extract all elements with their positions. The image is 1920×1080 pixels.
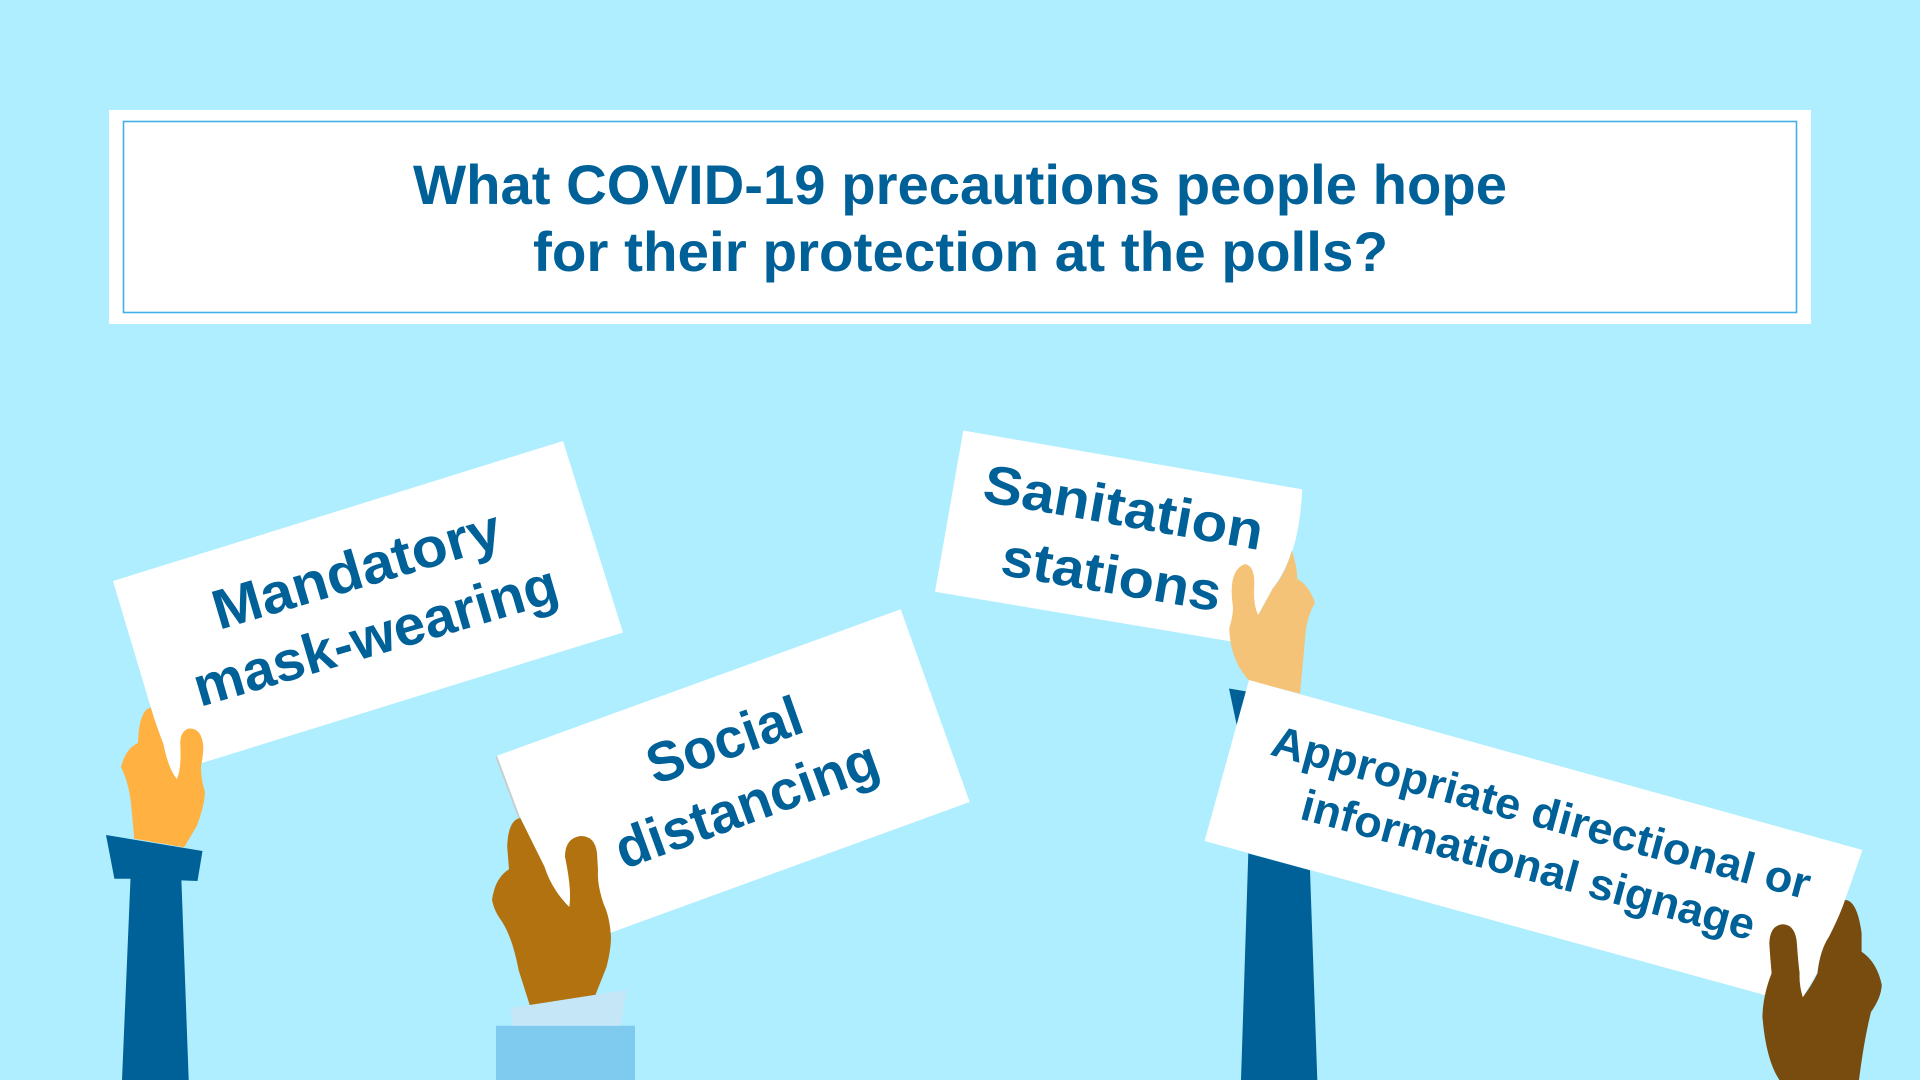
icon: brown hand (492, 818, 611, 1005)
icon: orange hand (121, 708, 205, 847)
panel: mandatory mask-wearing sign and arm (106, 441, 623, 1080)
sign text: stations (997, 527, 1226, 623)
panel: title banner (109, 110, 1811, 324)
panel: social distancing sign and arm (492, 609, 970, 1080)
sign: white card (935, 430, 1302, 643)
sign text: Mandatory (205, 496, 508, 642)
sign text: mask-wearing (186, 552, 565, 719)
panel: appropriate signage sign and hand (1205, 680, 1882, 1080)
shirt cuff (511, 990, 627, 1026)
sign text (979, 454, 1268, 623)
sign text: Appropriate directional or (1266, 717, 1816, 909)
arm and cuff: dark blue sleeve (106, 835, 202, 1080)
arm: dark blue sleeve (1229, 688, 1320, 1080)
sleeve: light blue (496, 1026, 635, 1080)
sign text: distancing (606, 727, 887, 881)
sign: white card (113, 441, 623, 779)
title: What COVID-19 precautions people hope (413, 153, 1507, 216)
sign text: informational signage (1296, 781, 1761, 950)
paper crease shadow (142, 659, 156, 712)
panel: sanitation stations sign and arm (935, 430, 1320, 1080)
icon: light tan hand (1229, 550, 1315, 694)
title (413, 153, 1507, 283)
sign: white card (1205, 680, 1862, 997)
sign text: Social (638, 683, 811, 796)
icon: dark brown hand (1762, 900, 1882, 1080)
sign: white card (497, 609, 970, 933)
title: for their protection at the polls? (533, 220, 1388, 283)
sign text: Sanitation (979, 454, 1268, 562)
paper crease shadow (496, 756, 523, 820)
